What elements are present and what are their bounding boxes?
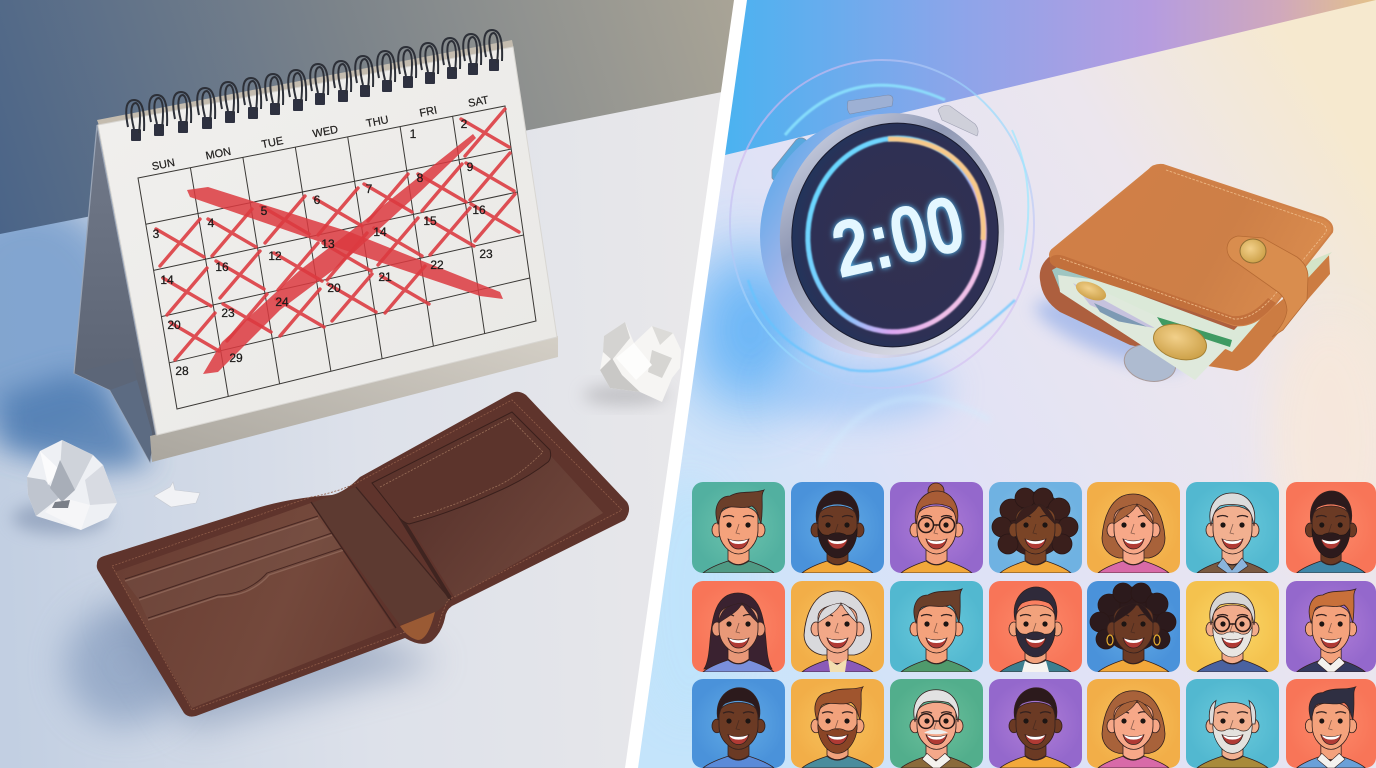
full tan wallet bbox=[1040, 165, 1332, 386]
weekday labels: THU bbox=[365, 114, 390, 130]
avatar: bearded dark man bbox=[791, 482, 884, 573]
date numbers: 13 bbox=[321, 237, 335, 251]
glow rings bbox=[730, 60, 1034, 465]
date numbers: 16 bbox=[472, 203, 486, 217]
avatar: man orange hair bbox=[1286, 581, 1376, 672]
avatar: woman bob pink shirt bbox=[1087, 679, 1180, 768]
calendar grid bbox=[138, 106, 536, 409]
wallet back bbox=[1040, 256, 1300, 360]
wallet flap bbox=[1050, 165, 1332, 325]
avatar: young dark man bbox=[692, 679, 785, 768]
avatar: man dark quiff bbox=[1286, 679, 1376, 768]
weekday labels: MON bbox=[205, 146, 232, 162]
silver coin bbox=[1121, 340, 1179, 386]
avatar: man auburn beard bbox=[791, 679, 884, 768]
avatar: woman afro with hoops bbox=[1087, 581, 1180, 672]
wallet strap bbox=[1227, 236, 1308, 337]
pocket flap bbox=[372, 412, 551, 524]
timer buttons bbox=[772, 95, 978, 183]
avatar: bald man white beard bbox=[1186, 679, 1279, 768]
timer body bbox=[760, 114, 1004, 358]
empty brown wallet bbox=[97, 392, 629, 717]
timer dial bbox=[777, 110, 1013, 360]
avatar: older man white hair bbox=[1186, 482, 1279, 573]
divider stripe bbox=[625, 0, 747, 768]
weekday labels: SUN bbox=[151, 157, 176, 173]
paper scrap bbox=[154, 482, 200, 507]
avatar: woman curly hair bbox=[989, 482, 1082, 573]
card slots bbox=[125, 516, 344, 620]
date numbers: 14 bbox=[160, 273, 174, 287]
date numbers bbox=[153, 117, 493, 378]
avatar grid bbox=[692, 482, 1376, 768]
avatar: bearded man coral bbox=[1286, 482, 1376, 573]
date numbers: 21 bbox=[378, 270, 392, 284]
date numbers: 24 bbox=[275, 295, 289, 309]
weekday labels: FRI bbox=[419, 104, 438, 120]
stitching bbox=[112, 400, 622, 710]
date numbers: 20 bbox=[167, 318, 181, 332]
calendar bbox=[74, 30, 558, 462]
date numbers: 16 bbox=[215, 260, 229, 274]
weekday labels bbox=[151, 94, 490, 173]
date numbers: 28 bbox=[175, 364, 189, 378]
avatar: older woman grey hair bbox=[791, 581, 884, 672]
avatar: older man glasses white beard bbox=[1186, 581, 1279, 672]
date numbers: 29 bbox=[229, 351, 243, 365]
lower wallet leaf bbox=[1208, 255, 1330, 371]
date numbers: 12 bbox=[268, 249, 282, 263]
date numbers: 8 bbox=[417, 171, 424, 185]
time readout glow: 2:00 bbox=[824, 178, 972, 295]
left panel bbox=[115, 503, 394, 708]
right pocket bbox=[409, 455, 603, 598]
coins bbox=[1073, 278, 1210, 365]
wallet outer leather bbox=[97, 392, 629, 717]
avatar: man teal tile bbox=[890, 581, 983, 672]
crumpled paper: right bbox=[583, 322, 681, 405]
avatar: woman long hair bbox=[692, 581, 785, 672]
date numbers: 23 bbox=[479, 247, 493, 261]
weekday labels: TUE bbox=[260, 135, 284, 151]
spiral binding bbox=[126, 30, 502, 141]
date numbers: 20 bbox=[327, 281, 341, 295]
date numbers: 1 bbox=[410, 127, 417, 141]
panel: right scene background bbox=[632, 0, 1376, 768]
date numbers: 22 bbox=[430, 258, 444, 272]
center fold bbox=[311, 487, 451, 625]
weekday labels: SAT bbox=[467, 94, 490, 110]
weekday labels: WED bbox=[312, 124, 339, 140]
crumpled paper: left bbox=[12, 440, 117, 534]
progress ring bbox=[795, 127, 997, 343]
red crosses on days bbox=[156, 109, 519, 360]
date numbers: 3 bbox=[153, 227, 160, 241]
panel: left scene background bbox=[0, 0, 740, 768]
snap button bbox=[1240, 239, 1266, 263]
date numbers: 15 bbox=[423, 214, 437, 228]
tan wallet shadow bbox=[1028, 286, 1192, 384]
date numbers: 5 bbox=[261, 204, 268, 218]
avatar: man brown hair bbox=[692, 482, 785, 573]
timer bbox=[730, 60, 1034, 465]
date numbers: 6 bbox=[314, 193, 321, 207]
date numbers: 7 bbox=[366, 182, 373, 196]
wallet shadow bbox=[110, 610, 440, 730]
calendar page bbox=[98, 47, 557, 435]
cash bills bbox=[1052, 252, 1332, 386]
large red cross over month bbox=[187, 134, 503, 374]
avatar: woman with bun and glasses bbox=[890, 482, 983, 573]
avatar: woman brown bob bbox=[1087, 482, 1180, 573]
avatar: man dark beard bbox=[989, 581, 1082, 672]
calendar stand bbox=[74, 40, 558, 462]
date numbers: 23 bbox=[221, 306, 235, 320]
avatar: dark man purple tile bbox=[989, 679, 1082, 768]
time readout text: 2:00 bbox=[824, 178, 972, 295]
date numbers: 14 bbox=[373, 225, 387, 239]
date numbers: 9 bbox=[467, 160, 474, 174]
date numbers: 2 bbox=[461, 117, 468, 131]
avatar: older man glasses moustache bbox=[890, 679, 983, 768]
date numbers: 4 bbox=[208, 216, 215, 230]
